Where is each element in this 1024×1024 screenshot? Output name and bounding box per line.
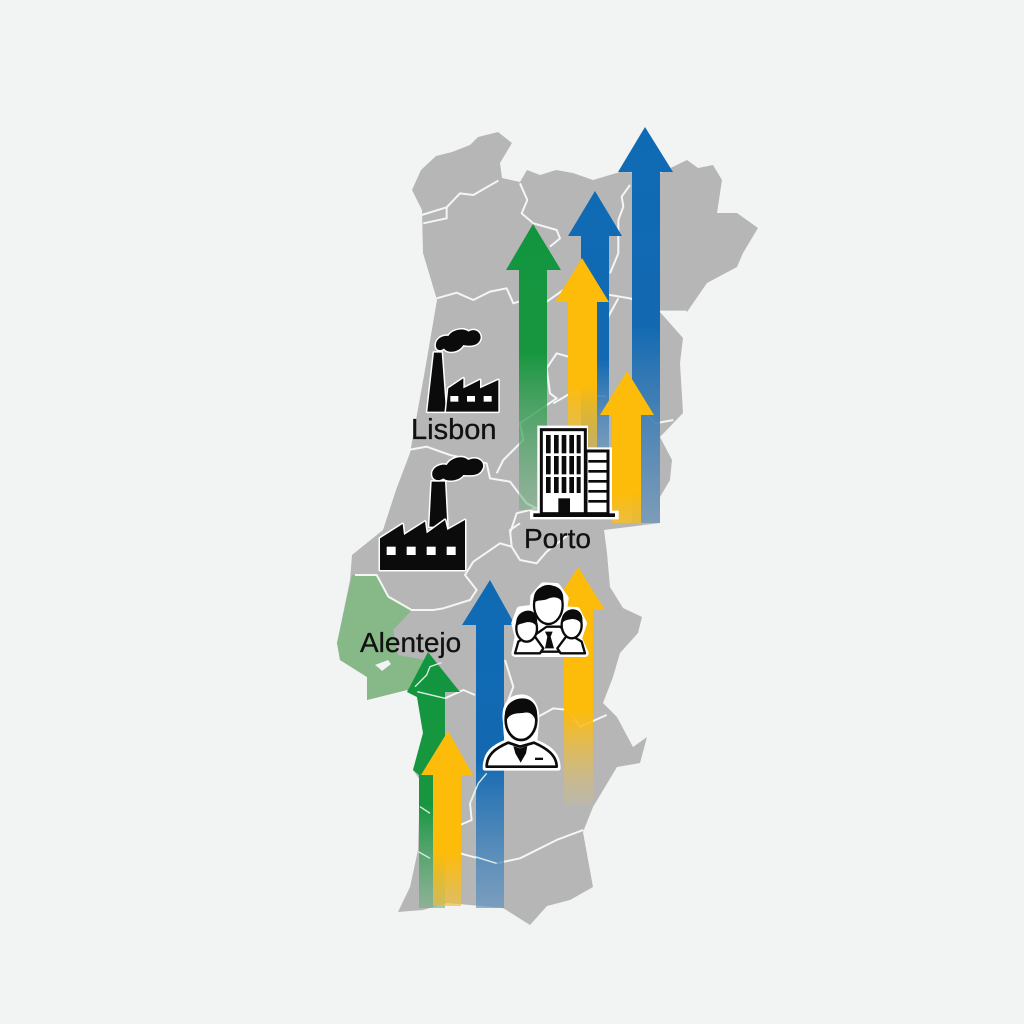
label: Porto: Porto	[524, 523, 591, 554]
arrow: tall blue	[618, 127, 673, 523]
arrow: central yellow	[551, 567, 605, 805]
northern region borders	[408, 181, 687, 533]
label: Lisbon: Lisbon	[411, 414, 496, 446]
icon: office building	[530, 426, 619, 519]
arrow: northern yellow	[555, 258, 609, 470]
icon: group of people	[515, 586, 585, 653]
arrow: southern yellow	[421, 731, 473, 906]
map of Portugal	[337, 132, 758, 925]
region highlight: Alentejo	[337, 575, 425, 700]
icon: factory lower	[380, 457, 483, 570]
icon: factory upper	[427, 330, 498, 412]
arrow: second blue	[568, 191, 622, 470]
estuary	[375, 660, 391, 671]
lower region borders over arrows	[415, 663, 497, 863]
arrow: eastern yellow	[600, 371, 654, 523]
icon: single person	[485, 697, 558, 768]
arrow: central blue	[462, 580, 515, 908]
arrow: southern green	[407, 652, 460, 908]
southern region borders	[355, 523, 607, 863]
label: Alentejo: Alentejo	[360, 627, 461, 658]
arrow: northern green	[506, 224, 561, 510]
